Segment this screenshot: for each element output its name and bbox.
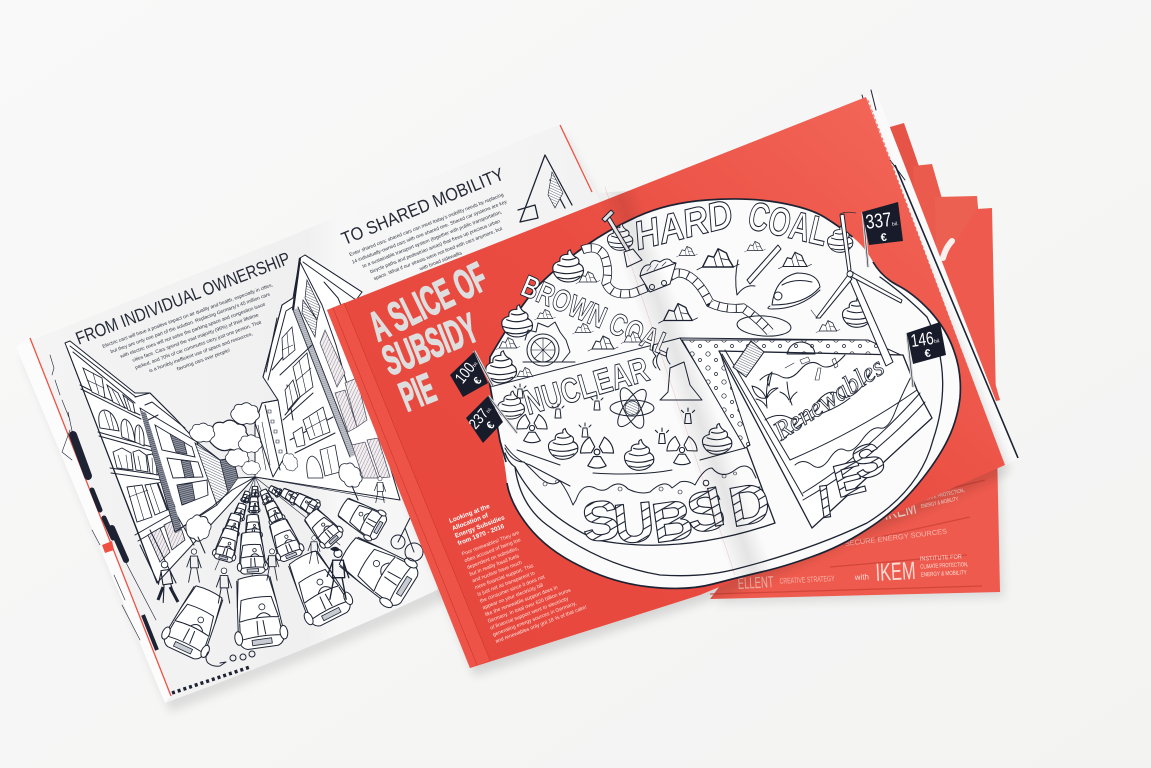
flag: 146 renewables: bil. — [934, 338, 941, 345]
paragraph: more financial support. This — [474, 563, 535, 591]
flag: 337 hard coal — [862, 202, 903, 267]
mine track — [582, 248, 770, 332]
coal rocks — [496, 241, 840, 378]
building: modern frame block — [135, 393, 217, 533]
illustration: subsidy pie on plate — [486, 187, 960, 588]
label: renewables script: Renewables — [767, 351, 889, 447]
solar panel — [733, 341, 764, 377]
subheading: from 1970 - 2016 — [457, 523, 506, 547]
building: right row — [255, 255, 400, 500]
flag: 146 renewables — [907, 322, 946, 387]
paragraph: like the renewable support does in — [484, 585, 559, 618]
paragraph: Germany. In total over 620 billion euros — [487, 587, 572, 625]
stacked cover sheets — [890, 123, 1000, 420]
IKEM logo lower: with — [854, 572, 869, 582]
white sausage letter on cover — [943, 241, 952, 258]
subheading — [448, 499, 509, 547]
flag: 237 nuclear: 237 — [466, 406, 492, 433]
Ellent logo — [737, 571, 836, 593]
flag: 337 hard coal: 337 — [864, 209, 893, 234]
panel: subsidy pie spread (red page) — [327, 97, 1010, 676]
wind turbine — [811, 212, 902, 366]
stack of booklets behind — [710, 123, 1004, 604]
red page edge line — [30, 125, 592, 696]
flag: 337 hard coal: € — [880, 232, 888, 244]
black illustration spilling through margin — [50, 355, 250, 693]
label: subsid letters: SUBSID — [579, 470, 775, 556]
paragraph: dependent on subsidies, — [466, 546, 520, 571]
paragraph: often accused of being too — [464, 537, 522, 564]
booklet: mobility spread — [16, 125, 600, 712]
label: nuclear: NUCLEAR — [519, 350, 653, 423]
body text: shared mobility: to a sustainable transport system (together with public transportation, — [362, 209, 503, 270]
IKEM logo lower — [853, 554, 969, 588]
title: a slice of subsidy pie — [361, 253, 494, 420]
pedestrians and cyclist — [155, 477, 423, 603]
flag: 100 brown coal: bil. — [472, 360, 479, 368]
subheading: Allocation of — [451, 512, 490, 532]
flag: 146 renewables: € — [924, 348, 932, 360]
paragraph: of financial support went to electricity — [489, 596, 570, 631]
body text: individual ownership: with electric ones will not solve the parking space and congestion issue — [120, 301, 267, 360]
subheading: Energy Subsidies — [454, 514, 506, 540]
coal cart — [640, 259, 676, 292]
body text: individual ownership: parked, and 70% of car commutes carry just one person. That — [134, 319, 263, 371]
street illustration — [65, 155, 572, 666]
paragraph: is just not as transparent to — [477, 570, 536, 598]
white margin strip — [16, 338, 171, 703]
footer logos on stack — [737, 486, 969, 593]
IKEM logo lower: CLIMATE PROTECTION, — [920, 562, 969, 571]
body text: individual ownership: Electric cars will have a positive impact on air quality and health, especially in cities, — [102, 282, 274, 350]
flag: 100 brown coal — [450, 351, 493, 397]
label: hard coal — [630, 192, 832, 259]
paragraph: the consumer since it does not — [479, 574, 546, 605]
paragraph — [461, 517, 588, 645]
IKEM logo lower: IKEM — [875, 557, 916, 587]
trees behind street — [181, 403, 367, 553]
paragraph: but in reality fossil fuels — [469, 553, 521, 578]
body text: shared mobility: 14 individually-owned cars with one shared one. Shared car systems are key — [351, 199, 508, 266]
building: left row — [65, 341, 255, 583]
duck family — [206, 651, 255, 666]
fuel rod candles — [514, 384, 695, 444]
body text: shared mobility: Enter shared cars: shared cars can meet today's mobility needs by replacing — [349, 192, 505, 258]
miner's helmet — [768, 273, 820, 309]
body text: shared mobility: bicycle paths and pedestrian areas) that frees up precious urban — [369, 218, 501, 275]
label: hard coal: COAL — [744, 194, 832, 255]
title: a slice of subsidy pie: SUBSIDY — [376, 304, 484, 384]
subheading: Looking at the — [448, 503, 491, 525]
traffic lanes — [158, 477, 424, 663]
shovel — [602, 210, 642, 267]
body text: individual ownership: favoring cars over people! — [176, 348, 231, 372]
mine hole — [736, 314, 792, 338]
body text: individual ownership: but they are only one part of the solution. Replacing Germany's 45 million cars — [110, 291, 271, 355]
paragraph: and renewables only got 18 % of that cake! — [495, 604, 588, 645]
flag: 237 nuclear: bil. — [485, 406, 493, 414]
right margin strip of open booklet — [862, 90, 1018, 466]
heading: from individual ownership: FROM INDIVIDUAL OWNERSHIP — [73, 248, 293, 349]
IKEM logo upper: CLIMATE PROTECTION, — [919, 488, 966, 503]
IKEM logo lower: INSTITUTE FOR — [920, 554, 963, 563]
Ellent logo: ELLENT — [737, 574, 774, 593]
page: spread paper — [16, 125, 600, 703]
title: a slice of subsidy pie: A SLICE OF — [361, 253, 494, 350]
mirrored strip text: SECURE ENERGY SOURCES — [844, 528, 948, 548]
flag: 100 brown coal: 100 — [452, 360, 479, 387]
pickaxe — [736, 245, 781, 295]
spine edge — [327, 303, 490, 668]
text block: allocation of energy subsidies — [448, 483, 588, 645]
flag: 237 nuclear: € — [484, 420, 497, 432]
paragraph: Poor renewables! They are — [461, 530, 520, 558]
bucket wheel excavator — [523, 322, 575, 366]
wavy cream layers on slice — [760, 355, 870, 440]
building: lower annex — [255, 400, 287, 477]
label: brown coal: BROWN COAL — [516, 268, 677, 363]
inner plate rim — [515, 277, 943, 576]
fold shadow on spread — [597, 190, 785, 578]
dome — [787, 342, 815, 354]
corner building on right page — [518, 155, 572, 222]
label: hard coal: HARD — [630, 192, 737, 259]
flag: 337 hard coal: bil. — [892, 221, 899, 228]
body text: individual ownership: is a horribly inefficient use of space and resources, — [148, 331, 254, 374]
flag: 237 nuclear — [466, 396, 517, 443]
cake top edge arcs — [490, 338, 868, 474]
body text: shared mobility — [348, 192, 520, 295]
cut face dotted sponge — [682, 340, 903, 448]
paragraph: generating energy sources in Germany, — [492, 601, 577, 638]
body text: individual ownership — [102, 282, 290, 394]
cake front side — [505, 448, 775, 545]
cooling tower with smoke — [652, 344, 702, 400]
IKEM logo upper: ENERGY & MOBILITY — [921, 496, 959, 510]
paragraph: appear on your electricity bill — [482, 583, 544, 611]
IKEM logo upper: IKEM — [881, 497, 918, 525]
flag: 146 renewables: 146 — [909, 328, 935, 351]
icing drips — [505, 445, 760, 505]
radiation signs — [515, 413, 699, 468]
stacked sheet edges — [710, 480, 985, 594]
flag: 100 brown coal: € — [471, 375, 485, 387]
title: a slice of subsidy pie: PIE — [393, 364, 442, 420]
paragraph: and nuclear have much — [471, 560, 523, 584]
IKEM logo lower: ENERGY & MOBILITY — [921, 570, 967, 579]
body text: shared mobility: with broad sidewalks — [419, 250, 464, 272]
IKEM logo upper — [881, 486, 969, 525]
plate and cake silhouette — [489, 199, 960, 588]
Ellent logo: CREATIVE STRATEGY — [779, 574, 835, 586]
label: ies letters: IES — [815, 431, 891, 528]
heading: to shared mobility: TO SHARED MOBILITY — [338, 164, 507, 249]
atom symbol — [610, 385, 654, 431]
body text: individual ownership: cities face. Cars spend the vast majority (95%) of their lifetime — [132, 312, 260, 364]
renewables slice — [719, 341, 932, 528]
body text: shared mobility: space. What if our streets were not lined with cars anymore, but — [373, 226, 504, 282]
cream swirls — [486, 224, 872, 470]
seedling plants — [752, 372, 797, 408]
